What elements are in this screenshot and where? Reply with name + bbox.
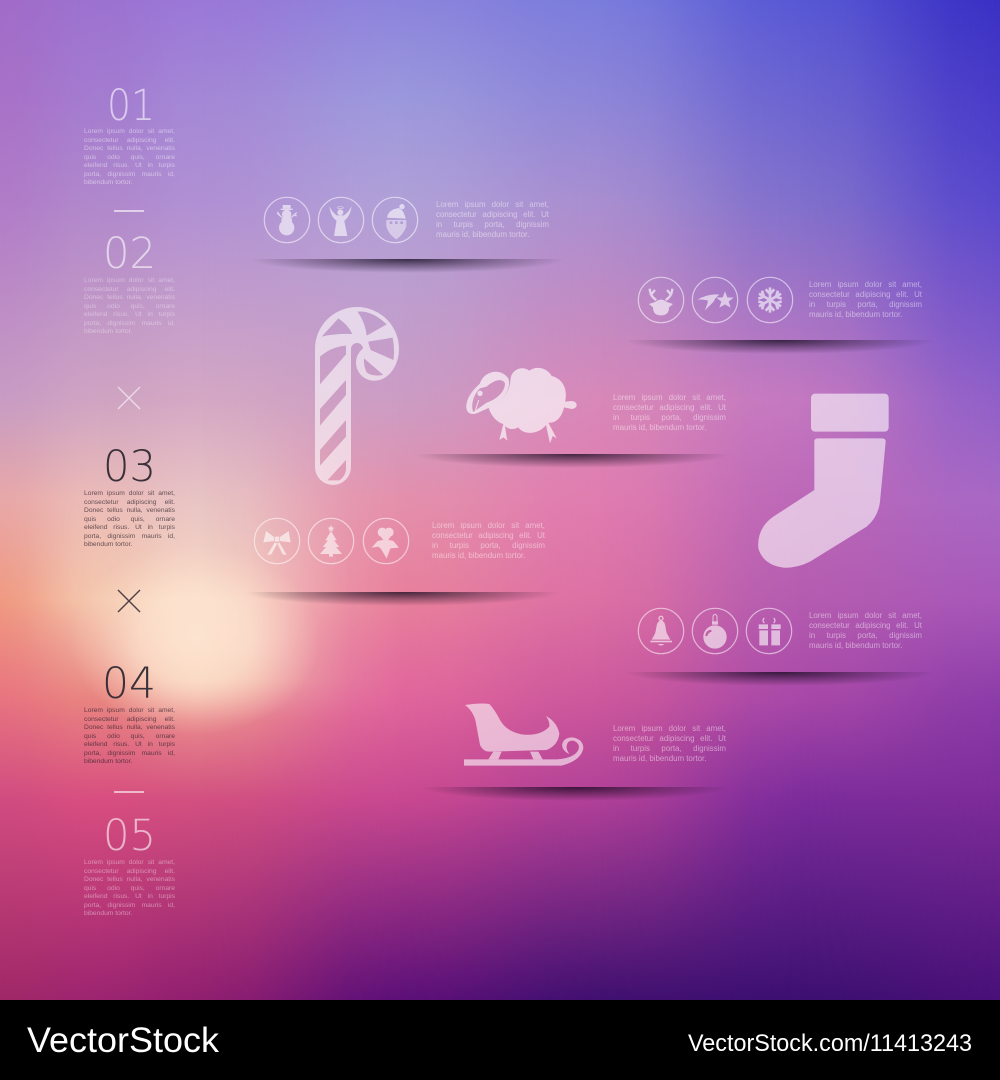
watermark bar: VectorStock.com/11413243 bbox=[688, 1030, 972, 1057]
text block 02: eleifend risus. Ut in turpis bbox=[84, 311, 175, 318]
text block: consectetur adipiscing elit. Ut bbox=[613, 734, 726, 743]
text block: consectetur adipiscing elit. Ut bbox=[613, 403, 726, 412]
text block bbox=[613, 393, 726, 432]
text block 01: consectetur adipiscing elit. bbox=[84, 137, 175, 144]
text block 04: bibendum tortor. bbox=[84, 758, 132, 765]
text block: consectetur adipiscing elit. Ut bbox=[436, 210, 549, 219]
text block 04: consectetur adipiscing elit. bbox=[84, 716, 175, 723]
watermark bar: VectorStock bbox=[27, 1021, 220, 1060]
text block 04: Lorem ipsum dolor sit amet, bbox=[84, 707, 175, 714]
text block 03: Donec tellus nulla, venenatis bbox=[84, 507, 175, 514]
divider dash bbox=[114, 210, 144, 212]
text block 05: porta, dignissim mauris id, bbox=[84, 902, 175, 909]
text block 03: consectetur adipiscing elit. bbox=[84, 499, 175, 506]
icon: candy cane bbox=[315, 307, 399, 485]
text block: mauris id, bibendum tortor. bbox=[613, 423, 706, 432]
icon: snowman bbox=[264, 196, 310, 244]
panel: icons snowman angel santa bbox=[260, 196, 554, 272]
icon: angel bbox=[318, 196, 364, 244]
text block bbox=[809, 280, 922, 319]
text block 01: porta, dignissim mauris id, bbox=[84, 171, 175, 178]
text block 02: consectetur adipiscing elit. bbox=[84, 286, 175, 293]
icon: sleigh bbox=[464, 704, 584, 766]
text block: in turpis porta, dignissim bbox=[809, 631, 922, 640]
text block: in turpis porta, dignissim bbox=[809, 300, 922, 309]
panel: sleigh bbox=[430, 704, 726, 800]
text block 02: bibendum tortor. bbox=[84, 328, 132, 335]
text block 05: consectetur adipiscing elit. bbox=[84, 868, 175, 875]
icon: ornament bbox=[692, 608, 738, 654]
text block 04: porta, dignissim mauris id, bbox=[84, 750, 175, 757]
text block: Lorem ipsum dolor sit amet, bbox=[432, 521, 545, 530]
icon: gift bbox=[746, 608, 792, 654]
shadow bbox=[625, 672, 935, 686]
panel: icons bell ornament gift bbox=[635, 608, 922, 685]
watermark bar bbox=[27, 1021, 972, 1060]
icon: sheep bbox=[466, 368, 577, 443]
divider dash lower bbox=[114, 791, 144, 793]
text block bbox=[436, 200, 549, 239]
text block: Lorem ipsum dolor sit amet, bbox=[809, 280, 922, 289]
icon: stocking bbox=[758, 394, 889, 568]
text block 02: porta, dignissim mauris id, bbox=[84, 320, 175, 327]
text block 03 bbox=[84, 490, 175, 548]
text block bbox=[809, 611, 922, 650]
text block 02: Lorem ipsum dolor sit amet, bbox=[84, 277, 175, 284]
numbered list column bbox=[84, 81, 175, 917]
text block 02: quis odio quis, ornare bbox=[84, 303, 175, 310]
text block: Lorem ipsum dolor sit amet, bbox=[613, 393, 726, 402]
text block 01: Donec tellus nulla, venenatis bbox=[84, 145, 175, 152]
text block 05: eleifend risus. Ut in turpis bbox=[84, 893, 175, 900]
text block 03: porta, dignissim mauris id, bbox=[84, 533, 175, 540]
panel: icons reindeer star snowflake bbox=[635, 276, 924, 353]
text block 03: eleifend risus. Ut in turpis bbox=[84, 524, 175, 531]
text block 01 bbox=[84, 128, 175, 186]
text block 04: eleifend risus. Ut in turpis bbox=[84, 741, 175, 748]
shadow bbox=[250, 259, 565, 273]
text block bbox=[613, 724, 726, 763]
text block bbox=[432, 521, 545, 560]
icon: snowflake bbox=[746, 276, 794, 324]
text block 03: Lorem ipsum dolor sit amet, bbox=[84, 490, 175, 497]
text block 02: Donec tellus nulla, venenatis bbox=[84, 294, 175, 301]
icon: bell bbox=[638, 608, 684, 654]
text block 04: quis odio quis, ornare bbox=[84, 733, 175, 740]
panel: icons bow tree holly bbox=[253, 518, 551, 606]
text block: consectetur adipiscing elit. Ut bbox=[809, 290, 922, 299]
text block 01: Lorem ipsum dolor sit amet, bbox=[84, 128, 175, 135]
icon: reindeer bbox=[638, 276, 684, 324]
shadow bbox=[415, 454, 730, 468]
icon: holly bell bbox=[362, 518, 410, 564]
shadow bbox=[625, 340, 935, 354]
text block: in turpis porta, dignissim bbox=[613, 744, 726, 753]
text block 05 bbox=[84, 859, 175, 917]
text block: Lorem ipsum dolor sit amet, bbox=[613, 724, 726, 733]
icon: bow bbox=[254, 518, 300, 564]
icon: shooting star bbox=[692, 276, 738, 324]
text block: mauris id, bibendum tortor. bbox=[436, 230, 529, 239]
icon: christmas tree bbox=[308, 518, 354, 564]
text block: in turpis porta, dignissim bbox=[436, 220, 549, 229]
shadow bbox=[420, 787, 730, 801]
panel: sheep bbox=[424, 368, 726, 467]
text block: mauris id, bibendum tortor. bbox=[432, 551, 525, 560]
text block 05: bibendum tortor. bbox=[84, 910, 132, 917]
text block: mauris id, bibendum tortor. bbox=[809, 310, 902, 319]
text block 03: quis odio quis, ornare bbox=[84, 516, 175, 523]
text block: in turpis porta, dignissim bbox=[613, 413, 726, 422]
text block: Lorem ipsum dolor sit amet, bbox=[436, 200, 549, 209]
icon: santa bbox=[372, 196, 418, 244]
divider cross dark bbox=[118, 590, 140, 612]
text block 01: eleifend risus. Ut in turpis bbox=[84, 162, 175, 169]
divider cross light bbox=[118, 386, 140, 410]
text block 05: Lorem ipsum dolor sit amet, bbox=[84, 859, 175, 866]
text block 04: Donec tellus nulla, venenatis bbox=[84, 724, 175, 731]
text block: mauris id, bibendum tortor. bbox=[613, 754, 706, 763]
text block 02 bbox=[84, 277, 175, 335]
text block 01: bibendum tortor. bbox=[84, 179, 132, 186]
text block: consectetur adipiscing elit. Ut bbox=[809, 621, 922, 630]
text block: Lorem ipsum dolor sit amet, bbox=[809, 611, 922, 620]
text block: consectetur adipiscing elit. Ut bbox=[432, 531, 545, 540]
shadow bbox=[245, 592, 560, 606]
text block 05: quis odio quis, ornare bbox=[84, 885, 175, 892]
text block 04 bbox=[84, 707, 175, 765]
text block 03: bibendum tortor. bbox=[84, 541, 132, 548]
text block 05: Donec tellus nulla, venenatis bbox=[84, 876, 175, 883]
text block: in turpis porta, dignissim bbox=[432, 541, 545, 550]
text block 01: quis odio quis, ornare bbox=[84, 154, 175, 161]
text block: mauris id, bibendum tortor. bbox=[809, 641, 902, 650]
